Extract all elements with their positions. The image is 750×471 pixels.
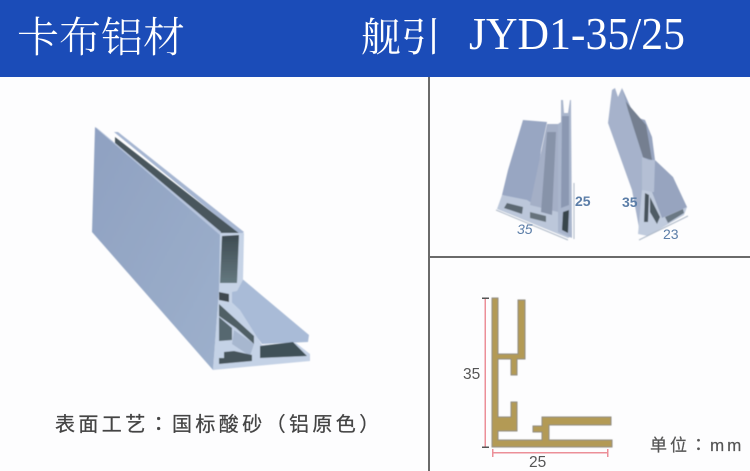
dimension labels: 23 [663, 226, 679, 242]
base [638, 190, 687, 236]
dimension line 35 [482, 298, 489, 448]
wide flat [502, 120, 547, 205]
small notch [219, 292, 229, 302]
surface finish caption: 表面工艺：国标酸砂（铝原色） [55, 413, 383, 436]
rail [232, 330, 254, 356]
panel: main 3D profile [92, 127, 310, 370]
left photo piece [497, 100, 572, 238]
dimension labels: 35 [517, 221, 533, 237]
end section frame [219, 233, 244, 304]
dimension labels: 25 [575, 193, 591, 209]
dimension labels [517, 193, 679, 242]
bottom chamber [219, 351, 252, 364]
panel: two photos [496, 88, 688, 240]
dark slots [644, 193, 649, 222]
brand title: 卡布铝材 [17, 16, 185, 62]
front face [608, 88, 643, 233]
header band [0, 0, 750, 77]
inner channel [115, 137, 240, 234]
lower base [213, 290, 310, 370]
label 25: 25 [529, 454, 546, 471]
dark slots [504, 203, 523, 214]
ridge [530, 124, 558, 212]
unit label: 单位：mm [650, 436, 744, 455]
lower flat surface [232, 277, 309, 344]
upright [558, 100, 572, 238]
model title: 舰引 [361, 15, 441, 60]
back surface [622, 88, 687, 227]
base [497, 195, 572, 238]
dimension labels: 35 [622, 194, 638, 210]
upper slot [220, 235, 239, 283]
dimension lines [496, 183, 688, 240]
back lip [114, 132, 244, 235]
dimension line 25 [492, 449, 608, 457]
right slot [260, 342, 307, 358]
face top edge [95, 127, 221, 235]
top column [642, 157, 655, 192]
right photo piece [608, 88, 687, 236]
label 35: 35 [463, 366, 480, 383]
gold profile [492, 298, 612, 447]
inner chamber [219, 317, 232, 341]
channel [620, 95, 652, 160]
model title: JYD1-35/25 [469, 10, 685, 60]
panel dividers [428, 77, 750, 471]
cross-section drawing [463, 298, 744, 471]
large face [92, 127, 220, 370]
ramp [219, 304, 254, 344]
model title [361, 10, 685, 60]
